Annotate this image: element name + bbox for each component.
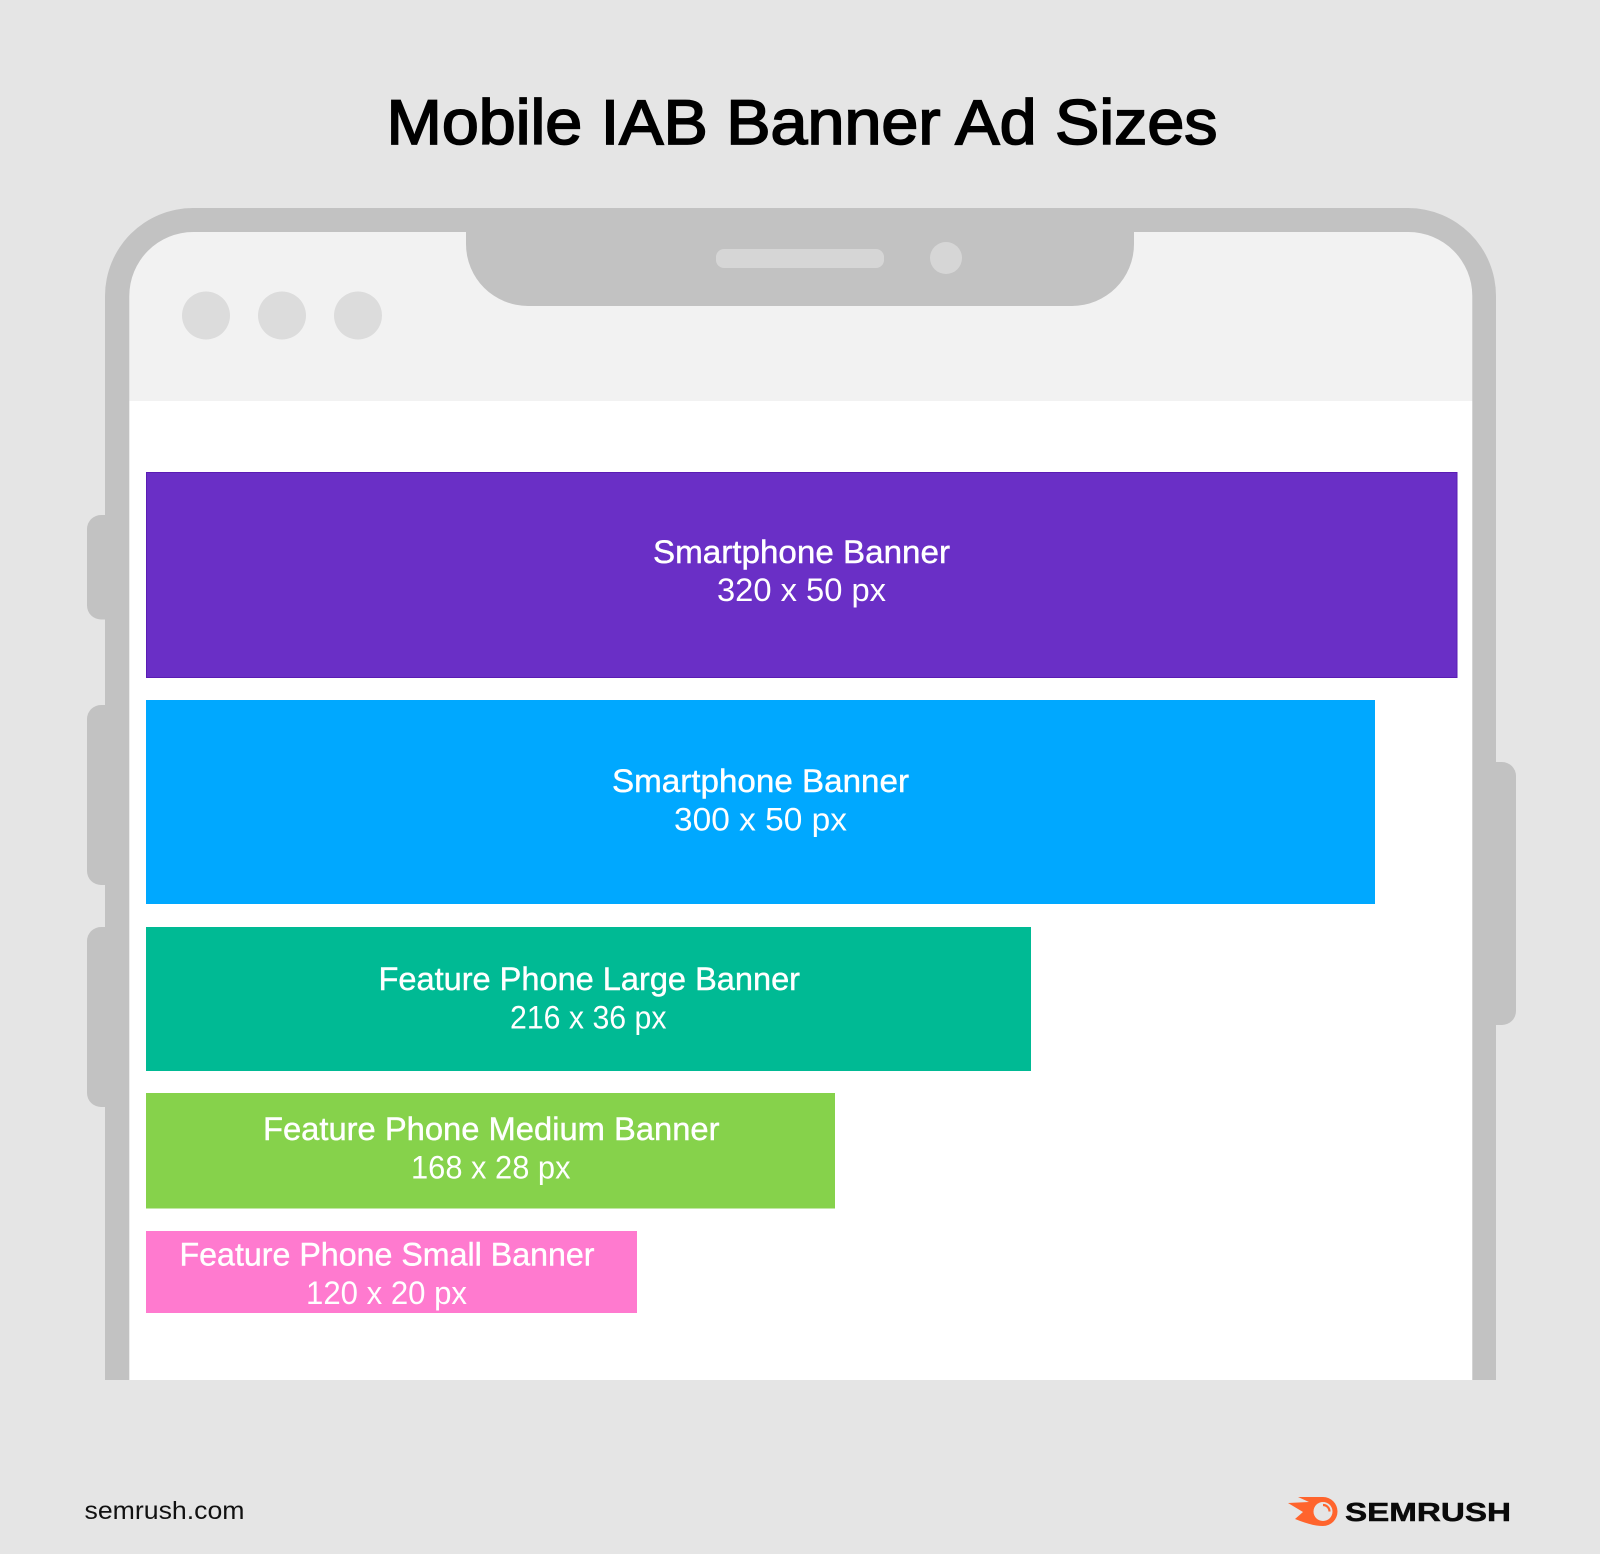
icon: semrush flame xyxy=(1288,1497,1338,1526)
right side button xyxy=(1476,762,1516,1025)
footer source url: semrush.com xyxy=(84,1497,244,1525)
banner: feature phone medium 168 x 28 xyxy=(146,1093,835,1208)
speaker pill xyxy=(716,249,884,268)
left side button: middle xyxy=(87,705,127,885)
banner: smartphone 300 x 50: 300 x 50 px xyxy=(674,802,847,838)
left side button: top xyxy=(87,515,127,620)
left side button: bottom xyxy=(87,927,127,1107)
white screen content area xyxy=(129,401,1472,1380)
browser dots xyxy=(182,292,382,340)
banner: smartphone 300 x 50: Smartphone Banner xyxy=(612,763,909,799)
banner: feature phone small 120 x 20 xyxy=(146,1231,637,1313)
title: Mobile IAB Banner Ad Sizes xyxy=(386,88,1218,158)
banner: feature phone small 120 x 20: Feature Phone Small Banner xyxy=(180,1236,595,1272)
banner: feature phone medium 168 x 28: 168 x 28 px xyxy=(411,1150,570,1186)
semrush logo xyxy=(1288,1497,1511,1527)
phone body frame xyxy=(105,208,1496,1380)
banner: feature phone medium 168 x 28: Feature Phone Medium Banner xyxy=(263,1111,720,1147)
wordmark: SEMRUSH xyxy=(1345,1499,1511,1527)
notch xyxy=(466,230,1134,306)
banner: feature phone large 216 x 36: 216 x 36 px xyxy=(510,1000,666,1036)
banner: smartphone 320 x 50: 320 x 50 px xyxy=(717,572,886,608)
phone illustration xyxy=(87,208,1516,1380)
banner: feature phone small 120 x 20: 120 x 20 px xyxy=(306,1275,467,1311)
banner: feature phone large 216 x 36 xyxy=(146,927,1031,1071)
banner: smartphone 320 x 50: Smartphone Banner xyxy=(653,534,950,570)
browser top bar xyxy=(129,232,1472,401)
camera xyxy=(930,242,962,274)
banner: smartphone 300 x 50 xyxy=(146,700,1375,904)
banner: smartphone 320 x 50 xyxy=(146,472,1457,678)
banner: feature phone large 216 x 36: Feature Phone Large Banner xyxy=(378,961,800,997)
